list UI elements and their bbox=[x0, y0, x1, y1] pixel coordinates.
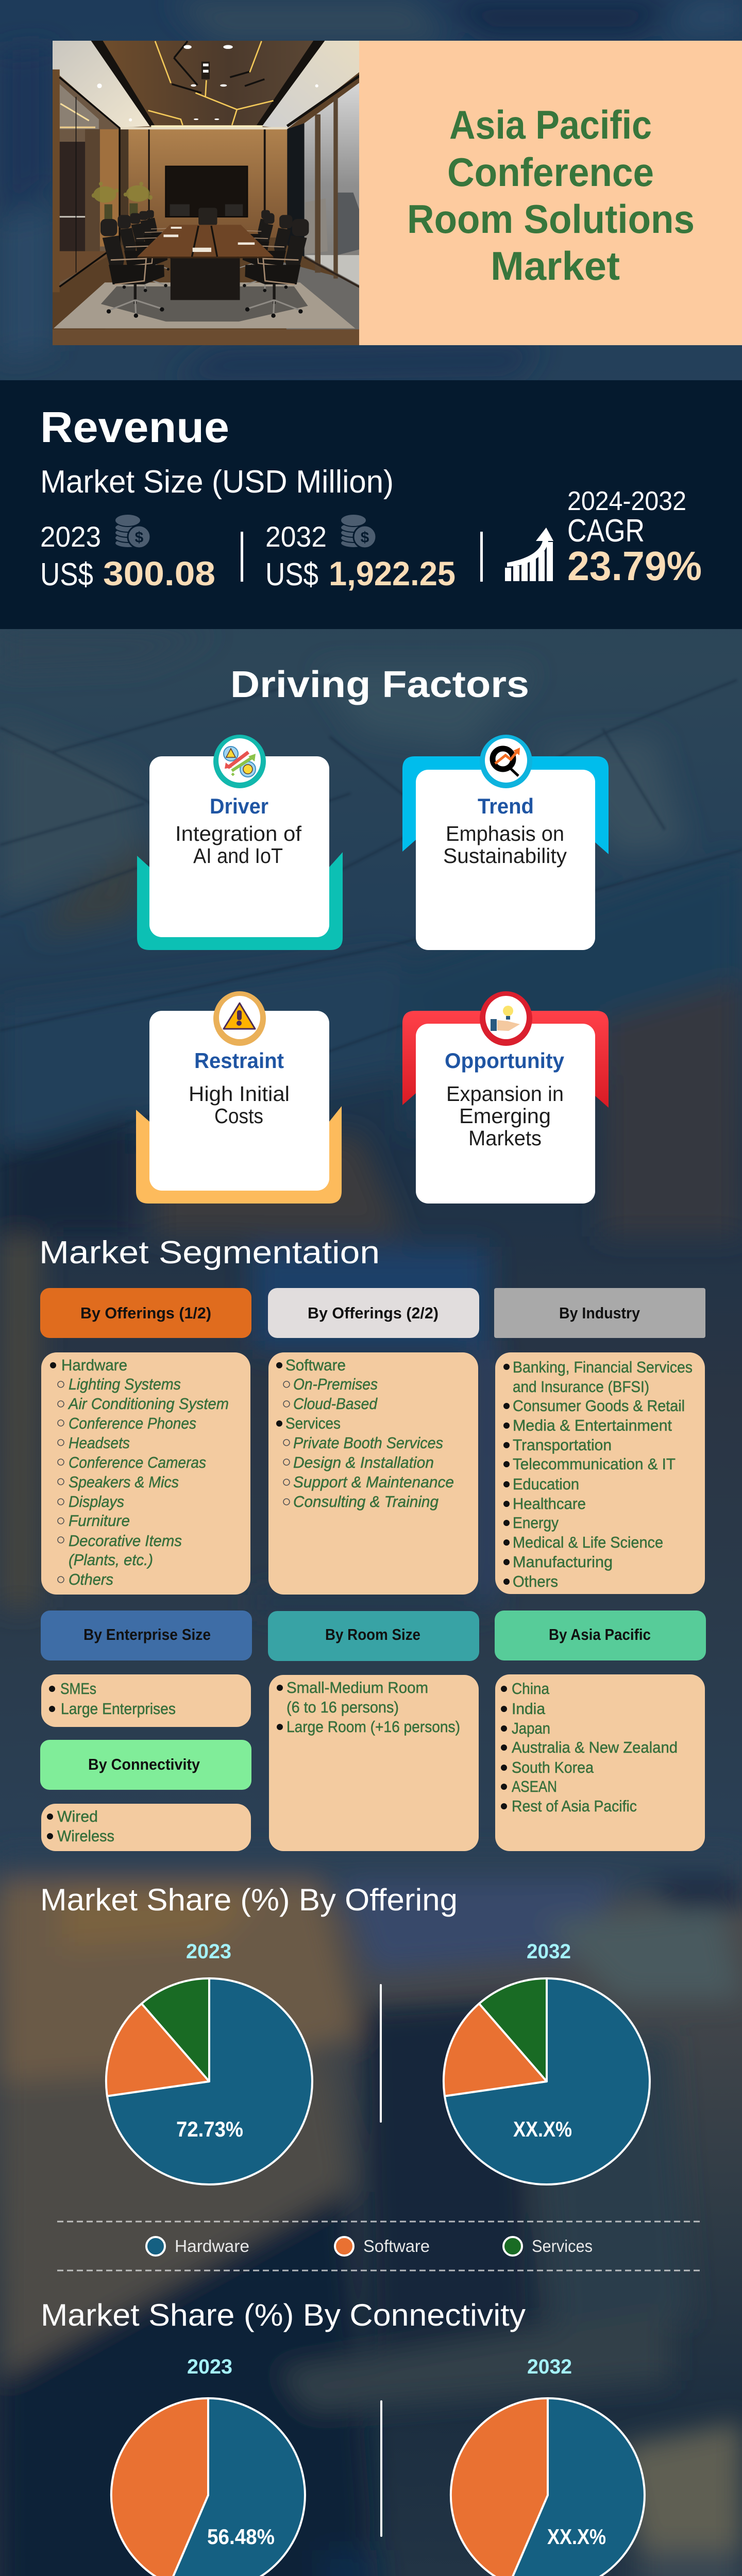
title: Asia Pacific bbox=[449, 102, 652, 147]
offerings hardware list: Others bbox=[69, 1570, 113, 1588]
trend title: Trend bbox=[478, 794, 534, 818]
trend text: Sustainability bbox=[443, 844, 567, 868]
connectivity list: Wireless bbox=[57, 1827, 114, 1845]
offerings hardware list: Conference Cameras bbox=[69, 1453, 206, 1471]
plants bbox=[92, 182, 153, 220]
CAGR value bbox=[567, 486, 702, 589]
offerings hardware list: Conference Phones bbox=[69, 1414, 196, 1432]
year labels: 2032 bbox=[527, 1940, 571, 1963]
asia pacific list bbox=[501, 1680, 678, 1815]
revenue heading: Revenue bbox=[40, 403, 229, 451]
year labels: 2023 bbox=[186, 1940, 231, 1963]
offerings hardware list: Headsets bbox=[69, 1434, 130, 1452]
back chairs bbox=[117, 208, 293, 292]
panel: by asia pacific bbox=[495, 1611, 706, 1851]
title: Conference bbox=[447, 149, 654, 195]
asia pacific list: China bbox=[512, 1680, 550, 1698]
opportunity text: Expansion in bbox=[446, 1082, 564, 1106]
offerings software and services list: Design & Installation bbox=[293, 1453, 434, 1471]
market size label: Market Size (USD Million) bbox=[40, 464, 394, 500]
offerings software and services list: Cloud-Based bbox=[293, 1395, 378, 1413]
pie chart 2023 bbox=[111, 2398, 305, 2576]
enterprise size list: Large Enterprises bbox=[61, 1700, 176, 1718]
divider bbox=[241, 532, 243, 582]
heading: Market Share (%) By Offering bbox=[40, 1883, 458, 1917]
segment header: By Enterprise Size bbox=[83, 1625, 211, 1643]
heading: market segmentation: Market Segmentation bbox=[39, 1235, 380, 1270]
offerings hardware list: (Plants, etc.) bbox=[69, 1551, 153, 1569]
heading: Market Share (%) By Connectivity bbox=[41, 2298, 526, 2332]
offerings hardware list: Displays bbox=[69, 1493, 124, 1511]
restraint text bbox=[189, 1082, 290, 1128]
industry list: Transportation bbox=[513, 1436, 612, 1454]
table bbox=[138, 225, 274, 300]
offerings hardware list: Lighting Systems bbox=[69, 1375, 181, 1393]
front chairs bbox=[100, 219, 309, 318]
metric: 2032 value bbox=[265, 520, 456, 592]
back wall bbox=[126, 128, 288, 238]
asia pacific list: Japan bbox=[512, 1719, 550, 1737]
panel: opportunity card bbox=[402, 991, 609, 1204]
icon: growth chart arrow bbox=[505, 528, 553, 581]
pie chart 2023: 56.48% bbox=[207, 2524, 275, 2549]
metric: 2023 value: 300.08 bbox=[103, 554, 215, 592]
title: Market bbox=[491, 243, 620, 289]
rug bbox=[54, 282, 355, 328]
title: Room Solutions bbox=[407, 196, 695, 242]
industry list bbox=[503, 1358, 693, 1590]
opportunity text: Markets bbox=[468, 1126, 542, 1150]
panel: by offerings 1 of 2 bbox=[40, 1288, 251, 1595]
offerings hardware list bbox=[50, 1356, 229, 1588]
panel: market share by offering bbox=[40, 1883, 700, 2270]
enterprise size list bbox=[49, 1680, 176, 1718]
industry list: Education bbox=[513, 1475, 579, 1493]
metric: 2023 value: US$ bbox=[40, 557, 93, 592]
asia pacific list: Australia & New Zealand bbox=[512, 1738, 678, 1756]
icon: trend bbox=[480, 735, 532, 788]
offerings hardware list: Speakers & Mics bbox=[69, 1473, 179, 1491]
offerings software and services list: Consulting & Training bbox=[293, 1493, 439, 1511]
offerings hardware list: Furniture bbox=[69, 1512, 130, 1530]
title bbox=[407, 102, 695, 289]
pie chart 2032 bbox=[444, 1978, 650, 2184]
restraint title: Restraint bbox=[194, 1048, 284, 1073]
pie chart 2023 bbox=[106, 1978, 312, 2184]
offerings hardware list: Air Conditioning System bbox=[68, 1395, 229, 1413]
pie chart 2032: XX.X% bbox=[513, 2117, 572, 2141]
segment header: By Asia Pacific bbox=[549, 1625, 651, 1643]
divider bbox=[480, 532, 483, 582]
panel: by enterprise size bbox=[41, 1611, 252, 1727]
icon: coins 2032: $ bbox=[361, 529, 369, 546]
room size list: Large Room (+16 persons) bbox=[286, 1718, 460, 1736]
room size list: (6 to 16 persons) bbox=[286, 1698, 399, 1716]
segment header: By Offerings (2/2) bbox=[308, 1304, 439, 1322]
icon: driver bbox=[213, 735, 266, 788]
offerings software and services list: On-Premises bbox=[293, 1375, 378, 1393]
metric: 2032 value: 2032 bbox=[265, 520, 327, 553]
title panel bbox=[359, 41, 742, 345]
room size list: Small-Medium Room bbox=[286, 1679, 428, 1697]
metric: 2023 value: 2023 bbox=[40, 520, 101, 553]
industry list: Banking, Financial Services bbox=[513, 1358, 693, 1376]
legend: Hardware bbox=[175, 2236, 249, 2256]
divider bbox=[380, 2400, 382, 2537]
panel: driver card bbox=[137, 735, 343, 950]
trend text: Emphasis on bbox=[446, 822, 564, 845]
offerings hardware list: Decorative Items bbox=[69, 1532, 182, 1550]
driver text bbox=[175, 822, 302, 868]
metric: 2032 value: 1,922.25 bbox=[329, 554, 456, 592]
year labels bbox=[187, 2355, 572, 2378]
panel: by room size bbox=[268, 1611, 479, 1851]
pie chart 2023: 72.73% bbox=[176, 2117, 243, 2141]
year labels bbox=[186, 1940, 571, 1963]
legend: Software bbox=[363, 2236, 430, 2256]
screen bbox=[165, 166, 247, 217]
industry list: Healthcare bbox=[513, 1495, 586, 1513]
panel: revenue bbox=[0, 380, 742, 629]
divider bbox=[380, 1984, 382, 2123]
connectivity list: Wired bbox=[57, 1807, 98, 1825]
icon: coins 2023: $ bbox=[135, 529, 144, 546]
industry list: Medical & Life Science bbox=[513, 1533, 663, 1551]
offerings software and services list: Support & Maintenance bbox=[293, 1473, 454, 1491]
asia pacific list: India bbox=[512, 1700, 546, 1718]
right windows bbox=[287, 123, 305, 257]
opportunity text: Emerging bbox=[459, 1104, 551, 1128]
driver text: Integration of bbox=[175, 822, 302, 845]
segment header: By Offerings (1/2) bbox=[80, 1304, 211, 1322]
offerings software and services list: Software bbox=[285, 1356, 346, 1374]
left glass room bbox=[59, 76, 120, 287]
industry list: Others bbox=[513, 1572, 558, 1590]
panel: restraint card bbox=[136, 991, 342, 1204]
offerings software and services list: Private Booth Services bbox=[293, 1434, 443, 1452]
icon: opportunity bbox=[480, 991, 532, 1046]
CAGR value: 2024-2032 bbox=[567, 486, 686, 516]
panel: by connectivity bbox=[40, 1740, 251, 1851]
year labels: 2032 bbox=[527, 2355, 572, 2378]
asia pacific list: Rest of Asia Pacific bbox=[512, 1797, 637, 1815]
segment header: By Industry bbox=[559, 1304, 640, 1322]
industry list: and Insurance (BFSI) bbox=[513, 1378, 649, 1396]
CAGR value: 23.79% bbox=[567, 543, 702, 589]
panel: by industry bbox=[494, 1288, 705, 1594]
ceiling bbox=[53, 40, 151, 128]
legend bbox=[146, 2236, 593, 2256]
driver title: Driver bbox=[210, 794, 268, 818]
pie chart 2032 bbox=[451, 2398, 645, 2576]
driver text: AI and IoT bbox=[193, 844, 283, 868]
industry list: Consumer Goods & Retail bbox=[513, 1397, 685, 1415]
industry list: Manufacturing bbox=[513, 1553, 613, 1571]
legend: Services bbox=[532, 2236, 593, 2256]
connectivity list bbox=[47, 1807, 114, 1845]
segment header: By Room Size bbox=[325, 1625, 420, 1643]
restraint text: Costs bbox=[214, 1104, 263, 1128]
room size list bbox=[277, 1679, 460, 1736]
offerings software and services list: Services bbox=[285, 1414, 341, 1432]
offerings software and services list bbox=[276, 1356, 454, 1511]
icon: coins 2032 bbox=[341, 514, 376, 548]
icon: coins 2023 bbox=[115, 514, 150, 548]
heading: driving factors: Driving Factors bbox=[230, 664, 529, 705]
hero banner bbox=[52, 40, 742, 347]
pie chart 2032: XX.X% bbox=[547, 2524, 606, 2549]
industry list: Telecommunication & IT bbox=[513, 1455, 676, 1473]
restraint text: High Initial bbox=[189, 1082, 290, 1106]
asia pacific list: ASEAN bbox=[512, 1777, 557, 1795]
industry list: Media & Entertainment bbox=[513, 1416, 672, 1434]
enterprise size list: SMEs bbox=[60, 1680, 96, 1698]
opportunity title: Opportunity bbox=[445, 1048, 565, 1073]
trend text bbox=[443, 822, 567, 868]
opportunity text bbox=[446, 1082, 564, 1150]
panel: trend card bbox=[402, 735, 609, 950]
offerings hardware list: Hardware bbox=[61, 1356, 127, 1374]
metric: 2023 value bbox=[40, 520, 215, 592]
industry list: Energy bbox=[513, 1514, 559, 1532]
hero photo: conference room bbox=[53, 41, 359, 345]
icon: restraint bbox=[213, 991, 266, 1046]
segment header: By Connectivity bbox=[88, 1755, 200, 1773]
CAGR value: CAGR bbox=[567, 513, 645, 549]
panel: by offerings 2 of 2 bbox=[268, 1288, 479, 1595]
asia pacific list: South Korea bbox=[512, 1758, 594, 1776]
panel: market share by connectivity bbox=[41, 2298, 695, 2576]
year labels: 2023 bbox=[187, 2355, 232, 2378]
metric: 2032 value: US$ bbox=[265, 557, 318, 592]
